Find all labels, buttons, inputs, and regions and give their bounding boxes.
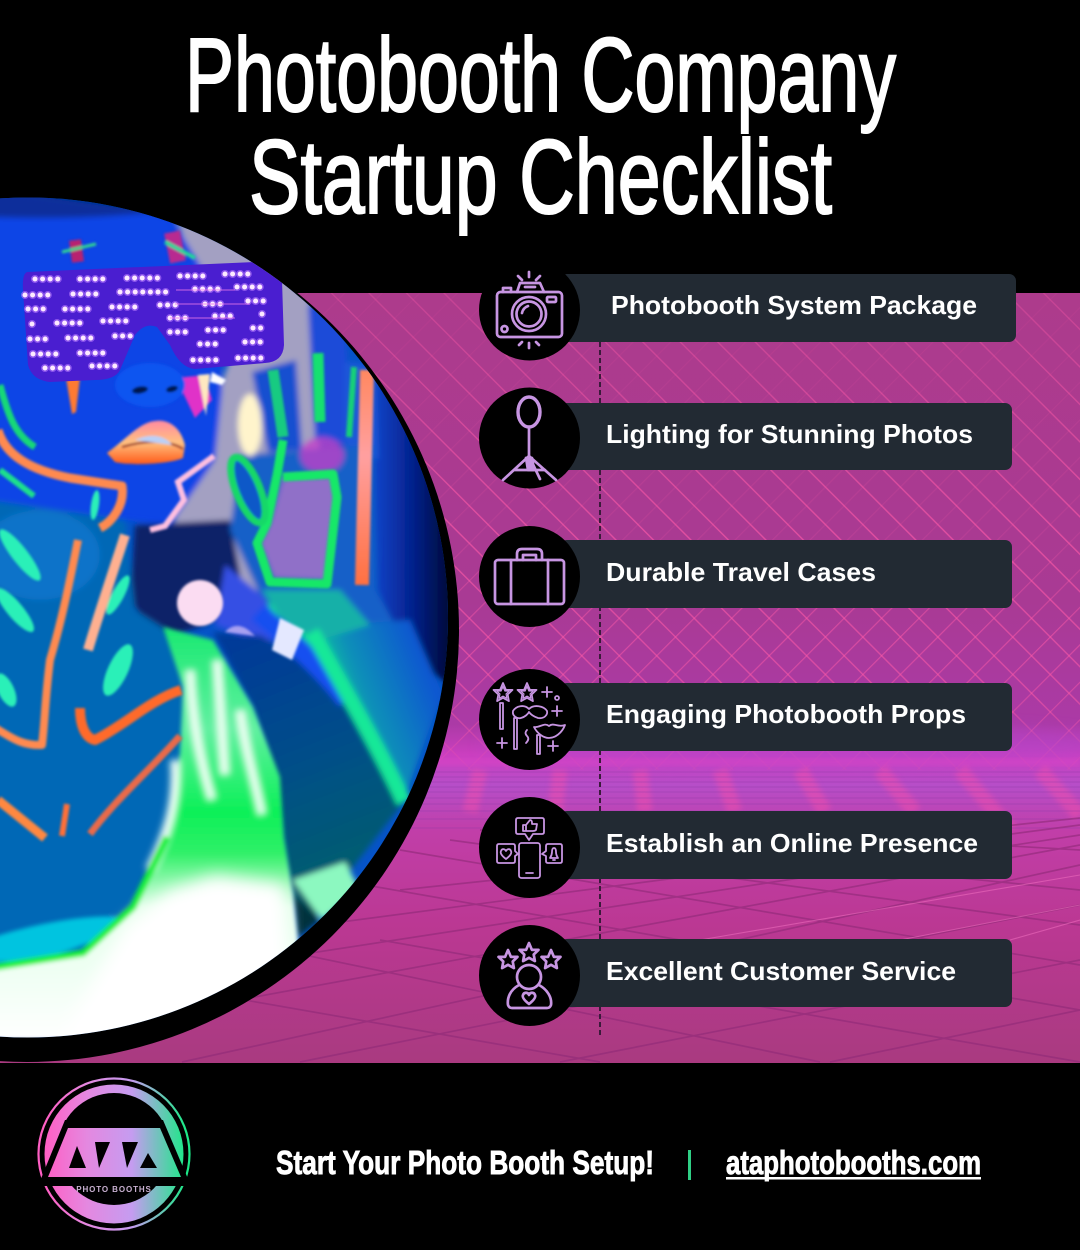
title: Startup Checklist: [249, 119, 832, 236]
fingers and palm: [252, 360, 302, 452]
lips: [107, 421, 185, 464]
checklist item 2: Lighting for Stunning Photos: [606, 419, 973, 449]
bokeh light: [177, 580, 223, 626]
neon paint lines: [0, 232, 367, 838]
checklist item 1: [479, 260, 1016, 360]
arm: [267, 603, 442, 803]
checklist item 4: Engaging Photobooth Props: [606, 699, 966, 729]
face: [0, 190, 222, 530]
checklist item 3: [479, 526, 1012, 627]
footer website link: ataphotobooths.com: [726, 1144, 981, 1181]
checklist item 5: [479, 797, 1012, 898]
body: [0, 500, 190, 975]
footer divider: [688, 1150, 691, 1180]
white arm patch: [272, 618, 304, 660]
checklist item 1: Photobooth System Package: [611, 290, 977, 320]
checklist item 6: [479, 925, 1012, 1026]
panel: neon grid backdrop: [0, 293, 1080, 1063]
icon: travel case: [495, 549, 564, 604]
neck shadow: [130, 520, 245, 640]
dark teal torso edge: [213, 632, 403, 935]
icon: photo booth props: [494, 683, 565, 754]
logo: ATA Photo Booths: PHOTO BOOTHS: [76, 1185, 152, 1194]
footer call to action: Start Your Photo Booth Setup!: [276, 1144, 654, 1181]
checklist item 5: Establish an Online Presence: [606, 828, 978, 858]
photo: woman in neon body paint with LED glasses: [0, 178, 470, 1062]
LED glasses: [23, 262, 284, 382]
checklist item 2: [479, 388, 1012, 488]
wall and far background: [170, 223, 321, 594]
checklist item 6: Excellent Customer Service: [606, 956, 956, 986]
title: [185, 17, 896, 236]
dress: [0, 627, 298, 1040]
checklist item 3: Durable Travel Cases: [606, 557, 876, 587]
logo: ATA Photo Booths: [38, 1078, 191, 1230]
icon: social media phone: [497, 818, 562, 878]
icon: customer with stars: [498, 943, 560, 1008]
icon: camera: [497, 272, 562, 348]
timeline dashed line: [599, 342, 601, 1038]
checklist item 4: [479, 669, 1012, 770]
icon: ring light on tripod: [503, 397, 556, 480]
